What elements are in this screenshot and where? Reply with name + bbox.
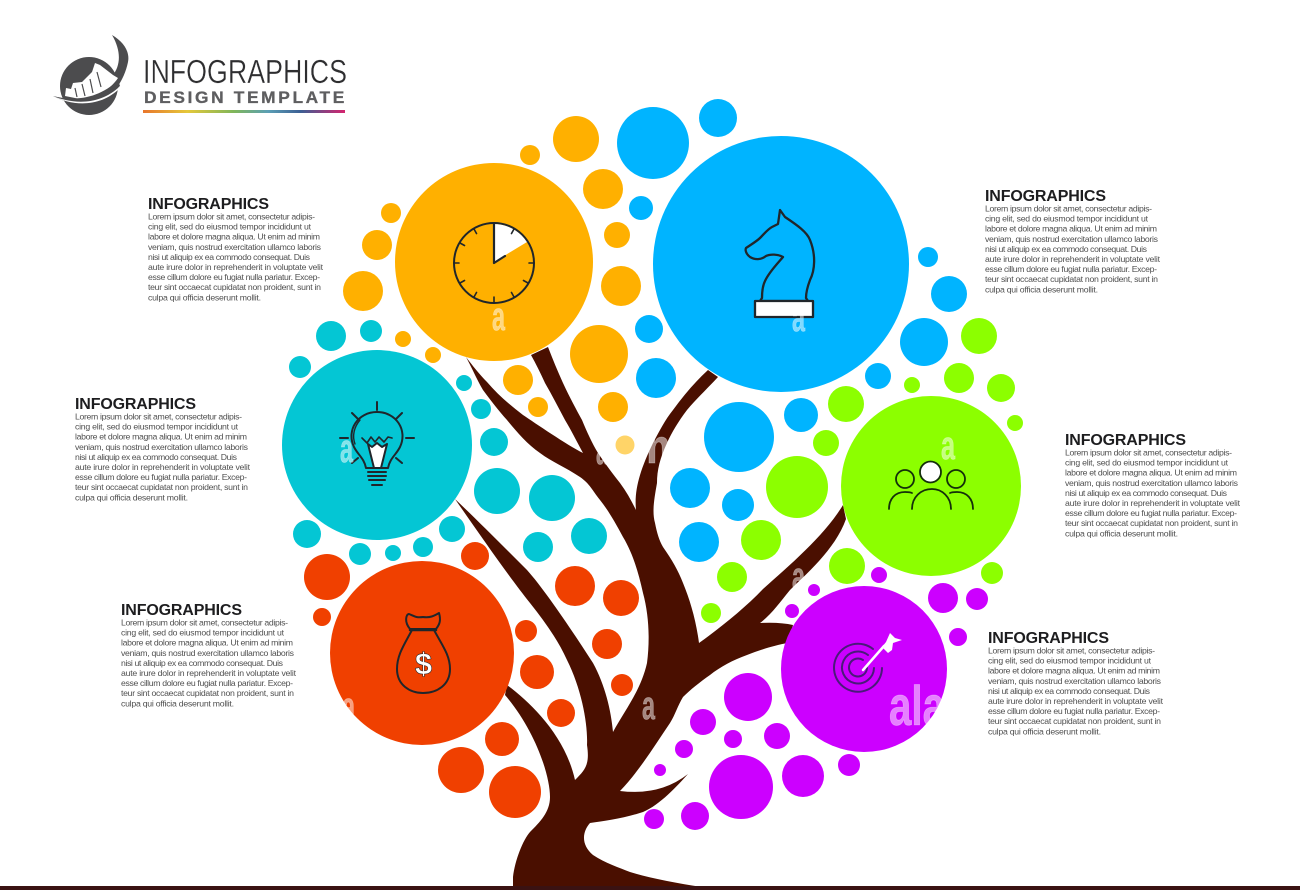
text block 3: nisi ut aliquip ex ea commodo consequat. Duis	[75, 452, 238, 462]
rainbow bar	[143, 110, 345, 113]
text block 4: veniam, quis nostrud exercitation ullamco laboris	[1065, 478, 1239, 488]
watermarks: a	[642, 684, 655, 728]
text block 5: INFOGRAPHICS	[121, 602, 242, 619]
text block 4	[1065, 432, 1241, 538]
text block 2: esse cillum dolore eu fugiat nulla pariatur. Excep-	[985, 264, 1157, 274]
text block 1: aute irure dolor in reprehenderit in voluptate velit	[148, 262, 324, 272]
text block 6: culpa qui officia deserunt mollit.	[988, 726, 1101, 736]
tree	[455, 347, 846, 887]
logo	[53, 35, 128, 115]
text block 6: aute irure dolor in reprehenderit in voluptate velit	[988, 696, 1164, 706]
circles: blue	[617, 99, 967, 562]
icon: chess knight	[746, 210, 814, 317]
text block 1: Lorem ipsum dolor sit amet, consectetur adipis-	[148, 212, 315, 222]
text block 1: nisi ut aliquip ex ea commodo consequat. Duis	[148, 252, 311, 262]
text block 6: cing elit, sed do eiusmod tempor incididunt ut	[988, 656, 1152, 666]
text block 3	[75, 396, 251, 502]
text block 4: culpa qui officia deserunt mollit.	[1065, 528, 1178, 538]
watermarks: a	[596, 429, 608, 473]
watermarks: ala	[889, 674, 946, 737]
text block 2: aute irure dolor in reprehenderit in voluptate velit	[985, 254, 1161, 264]
circles: yellow	[343, 116, 641, 454]
text block 5: teur sint occaecat cupidatat non proident, sunt in	[121, 688, 294, 698]
text block 3: cing elit, sed do eiusmod tempor incididunt ut	[75, 422, 239, 432]
icon: people	[889, 462, 973, 509]
text block 6	[988, 630, 1164, 736]
circles: green	[701, 318, 1023, 623]
logo title: INFOGRAPHICS	[143, 53, 347, 90]
watermarks: a	[941, 424, 955, 468]
text block 3: labore et dolore magna aliqua. Ut enim ad minim	[75, 432, 247, 442]
text block 2: teur sint occaecat cupidatat non proident, sunt in	[985, 274, 1158, 284]
text block 4: teur sint occaecat cupidatat non proident, sunt in	[1065, 518, 1238, 528]
circles: purple	[644, 567, 988, 830]
logo subtitle: DESIGN TEMPLATE	[144, 89, 347, 107]
watermarks	[340, 295, 955, 737]
text block 1: esse cillum dolore eu fugiat nulla pariatur. Excep-	[148, 272, 320, 282]
text block 6: teur sint occaecat cupidatat non proident, sunt in	[988, 716, 1161, 726]
text block 5: esse cillum dolore eu fugiat nulla pariatur. Excep-	[121, 678, 293, 688]
text block 3: veniam, quis nostrud exercitation ullamco laboris	[75, 442, 249, 452]
text block 6: labore et dolore magna aliqua. Ut enim ad minim	[988, 666, 1160, 676]
circles: teal	[282, 320, 607, 565]
text block 4: aute irure dolor in reprehenderit in voluptate velit	[1065, 498, 1241, 508]
text block 1: INFOGRAPHICS	[148, 196, 269, 213]
text block 2: Lorem ipsum dolor sit amet, consectetur adipis-	[985, 204, 1152, 214]
watermarks: m	[646, 421, 684, 474]
text block 3: Lorem ipsum dolor sit amet, consectetur adipis-	[75, 412, 242, 422]
text block 2: nisi ut aliquip ex ea commodo consequat. Duis	[985, 244, 1148, 254]
text block 6: veniam, quis nostrud exercitation ullamco laboris	[988, 676, 1162, 686]
text block 6: INFOGRAPHICS	[988, 630, 1109, 647]
text block 5	[121, 602, 297, 708]
icon: money bag	[397, 613, 450, 693]
circles: orange	[304, 542, 639, 818]
icon: money bag: $	[415, 646, 432, 681]
text block 2: culpa qui officia deserunt mollit.	[985, 284, 1098, 294]
watermarks: a	[340, 427, 353, 471]
text block 5: cing elit, sed do eiusmod tempor incididunt ut	[121, 628, 285, 638]
text block 5: aute irure dolor in reprehenderit in voluptate velit	[121, 668, 297, 678]
icon: light bulb	[340, 402, 414, 485]
text block 2: veniam, quis nostrud exercitation ullamco laboris	[985, 234, 1159, 244]
text block 3: teur sint occaecat cupidatat non proident, sunt in	[75, 482, 248, 492]
text block 1: teur sint occaecat cupidatat non proident, sunt in	[148, 282, 321, 292]
text block 3: esse cillum dolore eu fugiat nulla pariatur. Excep-	[75, 472, 247, 482]
ground line	[0, 886, 1300, 890]
text block 6: esse cillum dolore eu fugiat nulla pariatur. Excep-	[988, 706, 1160, 716]
text block 4: nisi ut aliquip ex ea commodo consequat. Duis	[1065, 488, 1228, 498]
text block 4: cing elit, sed do eiusmod tempor incididunt ut	[1065, 458, 1229, 468]
text block 1: cing elit, sed do eiusmod tempor incididunt ut	[148, 222, 312, 232]
text block 1: culpa qui officia deserunt mollit.	[148, 292, 261, 302]
text block 4: labore et dolore magna aliqua. Ut enim ad minim	[1065, 468, 1237, 478]
text block 1	[148, 196, 324, 302]
icon: clock	[454, 223, 534, 303]
text block 5: veniam, quis nostrud exercitation ullamco laboris	[121, 648, 295, 658]
text block 6: Lorem ipsum dolor sit amet, consectetur adipis-	[988, 646, 1155, 656]
text block 5: nisi ut aliquip ex ea commodo consequat. Duis	[121, 658, 284, 668]
text block 5: culpa qui officia deserunt mollit.	[121, 698, 234, 708]
text block 1: veniam, quis nostrud exercitation ullamco laboris	[148, 242, 322, 252]
text block 3: aute irure dolor in reprehenderit in voluptate velit	[75, 462, 251, 472]
icon: target	[834, 633, 902, 692]
text block 1: labore et dolore magna aliqua. Ut enim ad minim	[148, 232, 320, 242]
watermarks: a	[492, 295, 505, 339]
watermarks: a	[342, 685, 355, 729]
text block 6: nisi ut aliquip ex ea commodo consequat. Duis	[988, 686, 1151, 696]
text block 3: INFOGRAPHICS	[75, 396, 196, 413]
text block 4: Lorem ipsum dolor sit amet, consectetur adipis-	[1065, 448, 1232, 458]
watermarks: a	[792, 296, 805, 340]
text block 5: labore et dolore magna aliqua. Ut enim ad minim	[121, 638, 293, 648]
text block 3: culpa qui officia deserunt mollit.	[75, 492, 188, 502]
text block 2: labore et dolore magna aliqua. Ut enim ad minim	[985, 224, 1157, 234]
text block 4: esse cillum dolore eu fugiat nulla pariatur. Excep-	[1065, 508, 1237, 518]
text block 2: cing elit, sed do eiusmod tempor incididunt ut	[985, 214, 1149, 224]
watermarks: a	[792, 555, 805, 599]
text block 2	[985, 188, 1161, 294]
text block 4: INFOGRAPHICS	[1065, 432, 1186, 449]
text block 5: Lorem ipsum dolor sit amet, consectetur adipis-	[121, 618, 288, 628]
text block 2: INFOGRAPHICS	[985, 188, 1106, 205]
